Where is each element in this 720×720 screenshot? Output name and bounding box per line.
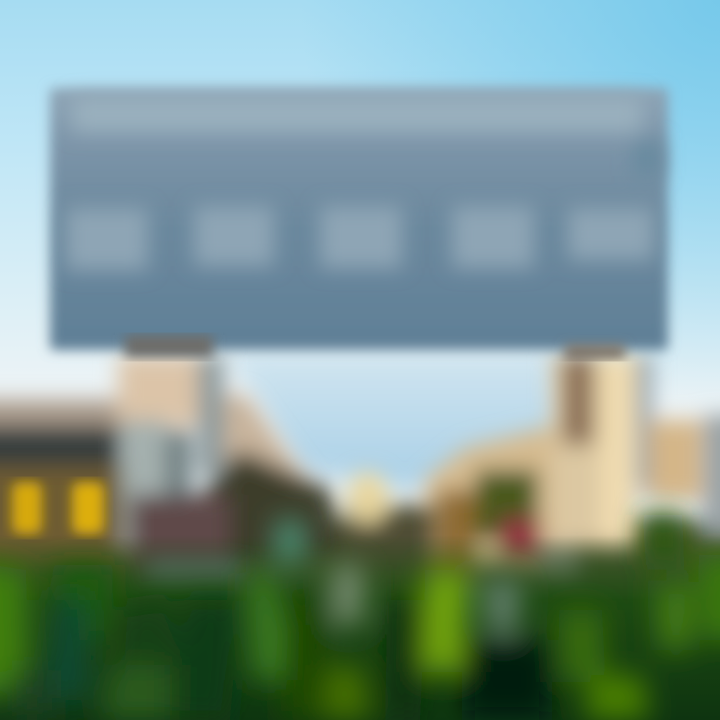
billboard heading blur <box>72 96 642 132</box>
foliage underlay <box>0 535 720 720</box>
left buildings <box>0 355 345 595</box>
building base band <box>0 520 720 610</box>
billboard corner shade <box>634 140 662 176</box>
billboard stat blocks <box>66 208 148 270</box>
billboard post tops <box>125 335 625 359</box>
right buildings <box>345 355 720 590</box>
billboard <box>50 88 668 350</box>
billboard text blurs <box>66 96 662 270</box>
yellow lights <box>12 482 104 534</box>
green foliage <box>0 515 720 720</box>
buildings <box>0 355 720 610</box>
foliage blades <box>0 515 720 720</box>
